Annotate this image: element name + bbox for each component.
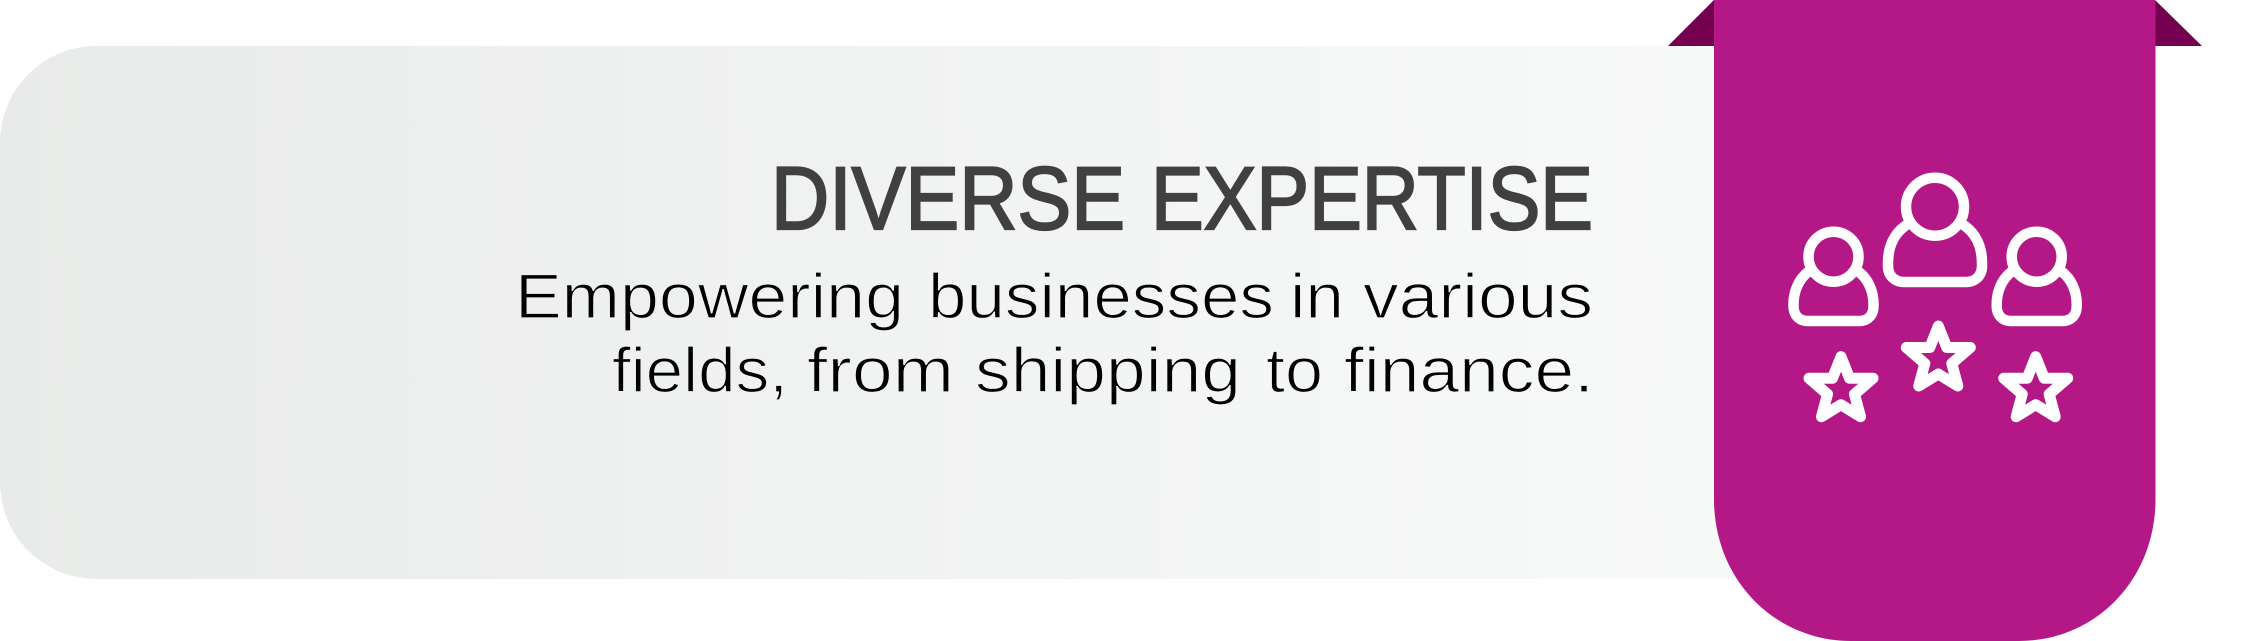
ribbon fold: left: [1668, 0, 1714, 46]
ribbon fold: right: [2155, 0, 2202, 46]
text block: description: from: [807, 336, 954, 406]
heading: [771, 148, 1593, 248]
text block: description: [515, 262, 1594, 406]
text block: description: Empowering: [515, 262, 904, 332]
text block: description: finance.: [1344, 336, 1594, 406]
text block: description: fields,: [612, 336, 788, 406]
icon: left star: [1809, 357, 1873, 417]
heading: EXPERTISE: [1151, 148, 1593, 248]
text block: description: to: [1266, 336, 1323, 406]
icon: centre person: [1888, 178, 1982, 282]
text block: description: shipping: [975, 336, 1241, 406]
heading: DIVERSE: [771, 148, 1125, 248]
icon: right star: [2004, 357, 2068, 417]
icon: left person: [1794, 232, 1874, 321]
icon: right person: [1997, 232, 2077, 321]
icon: team with stars: [1794, 178, 2077, 417]
text block: description: various: [1363, 262, 1593, 332]
text block: description: in: [1290, 262, 1344, 332]
text block: description: businesses: [928, 262, 1274, 332]
icon: centre star: [1906, 326, 1970, 386]
ribbon: [1714, 0, 2156, 641]
panel: grey background: [0, 46, 1800, 579]
